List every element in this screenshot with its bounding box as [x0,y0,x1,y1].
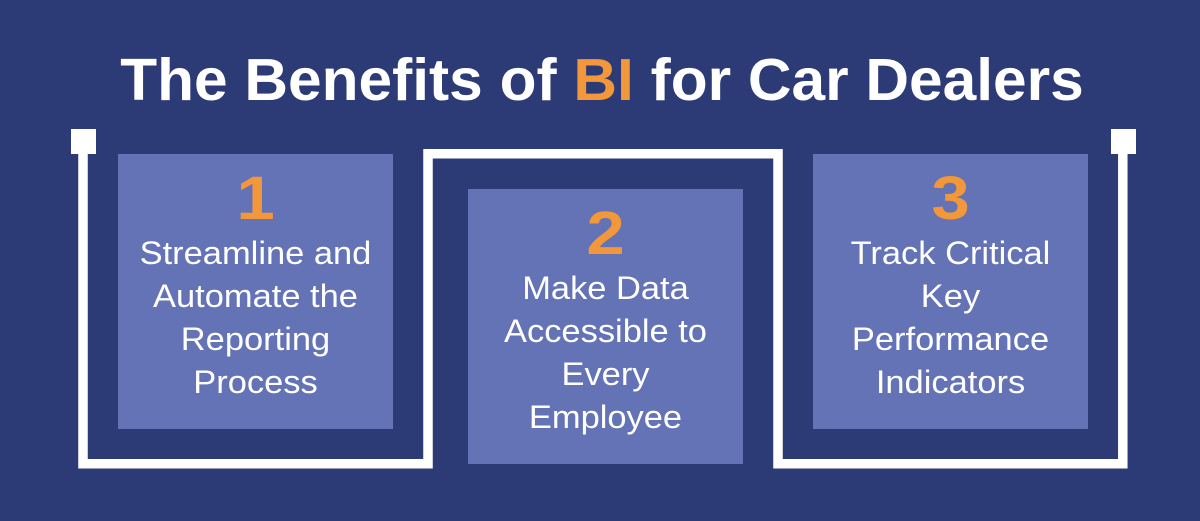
text: benefit 2: Employee [529,399,682,435]
panel: benefit 1 [118,154,393,429]
text: benefit 2: Every [561,356,650,392]
number 1: 1 [236,164,275,232]
text: benefit 1: Process [193,364,318,400]
text: benefit 3: Key [921,278,980,314]
text: benefit 1: Automate the [153,278,358,314]
panel: benefit 2 [468,189,743,464]
text: benefit 1 [140,235,371,400]
title: The Benefits of BI for Car Dealers [120,47,1083,113]
text: benefit 2 [504,270,707,435]
text: benefit 1: Streamline and [140,235,371,271]
text: benefit 3: Indicators [876,364,1025,400]
number 2: 2 [586,199,625,267]
number 3: 3 [931,164,970,232]
text: benefit 3 [851,235,1050,400]
text: benefit 2: Make Data [522,270,689,306]
panel: benefit 3 [813,154,1088,429]
text: benefit 3: Track Critical [851,235,1050,271]
text: benefit 1: Reporting [181,321,330,357]
text: benefit 2: Accessible to [504,313,707,349]
text: benefit 3: Performance [852,321,1049,357]
